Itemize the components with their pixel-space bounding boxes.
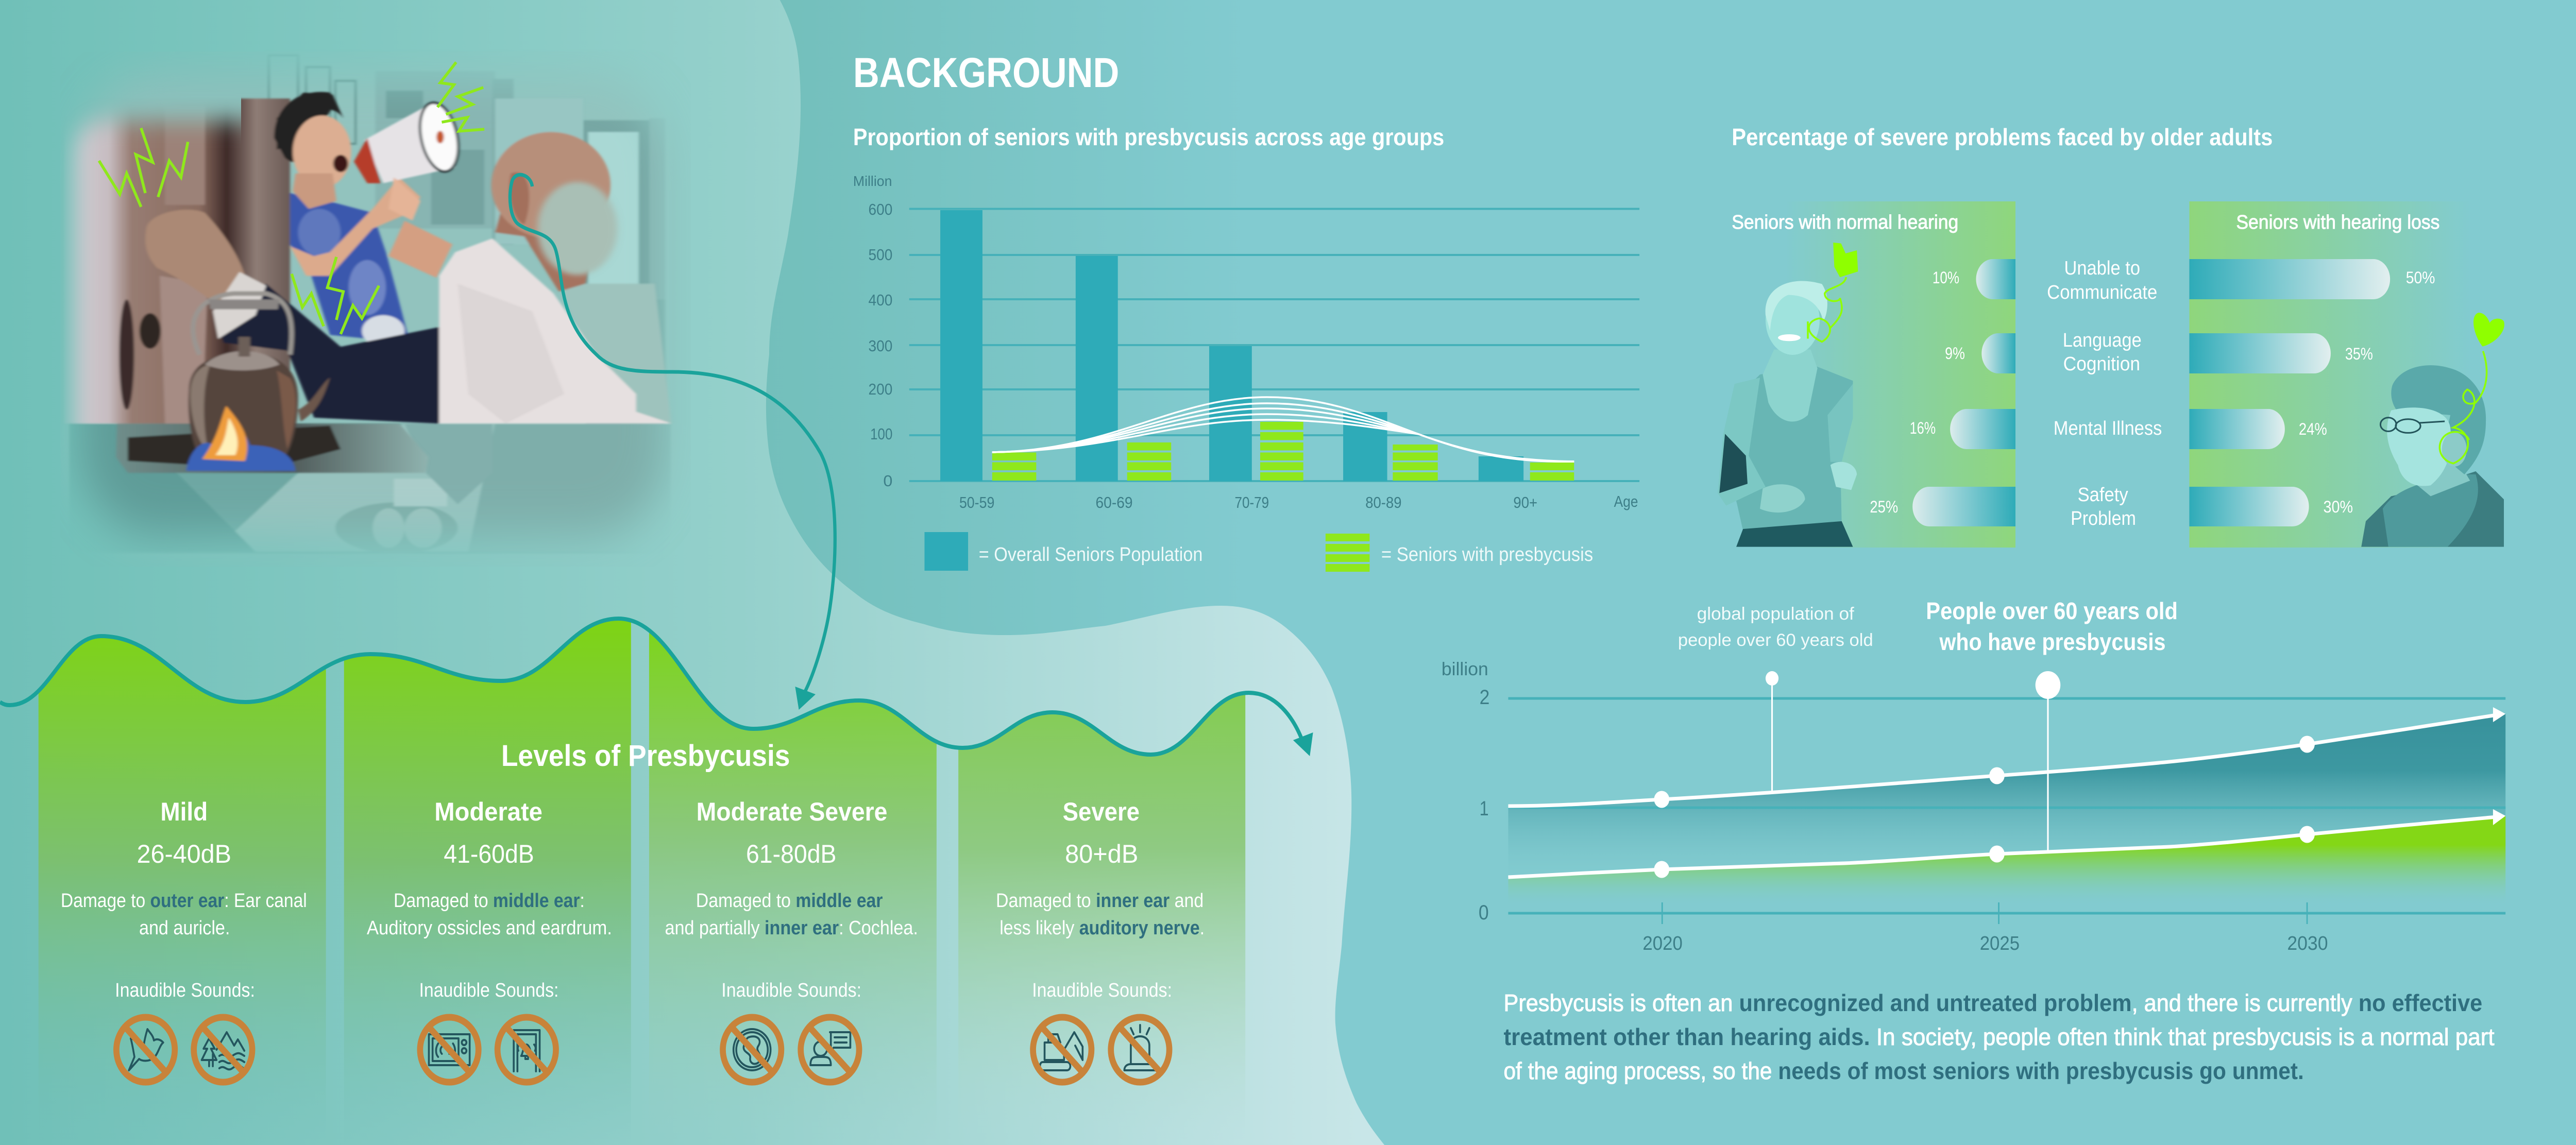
photo: sharp foreground figures bbox=[64, 92, 672, 473]
x axis labels: 50-59 bbox=[959, 494, 994, 511]
axis labels: 2030 bbox=[2287, 932, 2328, 954]
callout: global population: people over 60 years old bbox=[1678, 630, 1873, 650]
problem category labels: Safety bbox=[2078, 483, 2128, 505]
level: mild: 26-40dB bbox=[137, 840, 231, 869]
y axis labels: 300 bbox=[869, 337, 892, 355]
level: severe bbox=[996, 798, 1205, 1082]
photo: door bbox=[64, 98, 290, 423]
photo: woman hair and face bbox=[274, 92, 333, 162]
legend: = Seniors with presbycusis bbox=[1381, 543, 1593, 565]
values: normal hearing: 10% bbox=[1933, 269, 1959, 287]
heading: severe problems: Percentage of severe problems faced by older adults bbox=[1732, 124, 2273, 151]
level: moderate: Damaged to middle ear: bbox=[394, 889, 585, 911]
level: moderate bbox=[367, 798, 612, 1082]
level: mild: Inaudible Sounds: bbox=[115, 979, 255, 1001]
icon: no baby in womb bbox=[723, 1017, 781, 1082]
icon: no nature sounds bbox=[194, 1017, 252, 1082]
level: severe: Severe bbox=[1063, 798, 1140, 827]
line: presbycusis population bbox=[1508, 809, 2505, 878]
values: normal hearing bbox=[1870, 269, 1965, 516]
level: moderate severe: Moderate Severe bbox=[697, 798, 887, 827]
heading: levels of presbycusis: Levels of Presbycusis bbox=[501, 739, 790, 773]
level: moderate: Auditory ossicles and eardrum. bbox=[367, 916, 612, 938]
x axis labels: 80-89 bbox=[1365, 494, 1401, 511]
level: mild bbox=[61, 798, 307, 1082]
axis labels: 2 bbox=[1480, 686, 1489, 709]
level: moderate: Inaudible Sounds: bbox=[419, 979, 558, 1001]
panel: seniors with normal hearing: Seniors with normal hearing bbox=[1732, 211, 1958, 233]
photo: arm and fist knocking bbox=[215, 284, 439, 423]
level: moderate severe: 61-80dB bbox=[746, 840, 836, 869]
levels of presbycusis: green columns bbox=[39, 613, 1245, 1145]
axis labels: billion bbox=[1442, 659, 1488, 679]
photo: megaphone bbox=[365, 107, 455, 183]
photo: woman arms bbox=[290, 177, 420, 276]
y axis labels: 500 bbox=[869, 246, 892, 264]
level: severe: Damaged to inner ear and bbox=[996, 889, 1204, 911]
summary paragraph: treatment other than hearing aids. In society, people often think that presbycusis is a normal part bbox=[1503, 1024, 2495, 1051]
values: hearing loss bbox=[2299, 269, 2435, 516]
title: background: BACKGROUND bbox=[853, 48, 1119, 96]
wave line with arrow bbox=[0, 619, 1313, 756]
level: moderate severe: Inaudible Sounds: bbox=[721, 979, 861, 1001]
portrait: elderly woman with hearing aid bbox=[2361, 313, 2504, 547]
x axis labels: 70-79 bbox=[1235, 494, 1269, 511]
values: normal hearing: 9% bbox=[1945, 345, 1965, 363]
callout: people with presbycusis: who have presbycusis bbox=[1939, 629, 2166, 656]
area: global population over 60 bbox=[1508, 714, 2505, 886]
line: global population bbox=[1508, 707, 2505, 808]
problem category labels: Problem bbox=[2071, 507, 2136, 529]
y axis labels: 0 bbox=[883, 472, 892, 490]
axis labels: 0 bbox=[1479, 901, 1489, 924]
x axis labels: 60-69 bbox=[1096, 494, 1133, 511]
icon: no siren bbox=[1111, 1017, 1170, 1082]
problem category labels: Cognition bbox=[2063, 352, 2140, 374]
problem category labels bbox=[2047, 257, 2162, 529]
ear line connecting photo to levels, with arrow bbox=[510, 175, 835, 710]
x axis labels: Age bbox=[1614, 493, 1638, 510]
summary paragraph: Presbycusis is often an unrecognized and untreated problem , and there is currently no effective bbox=[1503, 990, 2482, 1017]
values: hearing loss: 50% bbox=[2406, 269, 2435, 287]
level: moderate: Moderate bbox=[434, 798, 543, 827]
icon: no doorbell bbox=[498, 1017, 556, 1082]
axis labels: 1 bbox=[1480, 797, 1489, 820]
bars: hearing loss bbox=[2189, 259, 2390, 526]
y axis labels: Million bbox=[853, 173, 892, 189]
callout: global population bbox=[1678, 604, 1873, 650]
y axis labels: 400 bbox=[869, 292, 892, 309]
level: severe: less likely auditory nerve. bbox=[999, 916, 1205, 938]
problem category labels: Unable to bbox=[2064, 257, 2140, 279]
problem category labels: Communicate bbox=[2047, 281, 2157, 303]
values: hearing loss: 24% bbox=[2299, 420, 2327, 438]
panel: seniors with normal hearing bbox=[1718, 201, 2015, 548]
callout: people with presbycusis: People over 60 years old bbox=[1926, 598, 2178, 625]
summary paragraph: of the aging process, so the needs of most seniors with presbycusis go unmet. bbox=[1503, 1058, 2304, 1085]
area chart: population over 60 bbox=[1442, 659, 2505, 954]
chart gridlines bbox=[1508, 698, 2505, 924]
problem category labels: Mental Illness bbox=[2054, 417, 2162, 439]
bar chart: seniors by age bbox=[853, 173, 1639, 572]
photo: woman dress bbox=[290, 193, 410, 343]
photo: man wall bbox=[495, 98, 583, 244]
y axis labels: 600 bbox=[869, 201, 892, 218]
callout pins bbox=[1766, 671, 2060, 851]
icon: no conversation bbox=[801, 1017, 859, 1082]
level: moderate severe: Damaged to middle ear bbox=[696, 889, 883, 911]
portrait: jogging woman bbox=[1718, 243, 1858, 547]
axis labels: 2025 bbox=[1980, 932, 2020, 954]
axis labels: 2020 bbox=[1642, 932, 1683, 954]
values: normal hearing: 25% bbox=[1870, 498, 1898, 516]
level: moderate severe bbox=[665, 798, 918, 1082]
photo: man shirt bbox=[439, 238, 672, 423]
values: normal hearing: 16% bbox=[1910, 419, 1936, 437]
photo: man head and neck bbox=[495, 205, 591, 292]
level: moderate: 41-60dB bbox=[444, 840, 534, 869]
icon: no birdsong bbox=[116, 1017, 175, 1082]
values: hearing loss: 30% bbox=[2324, 498, 2353, 516]
y axis labels: 100 bbox=[870, 425, 892, 443]
values: hearing loss: 35% bbox=[2345, 345, 2373, 363]
level: moderate severe: and partially inner ear: Cochlea. bbox=[665, 916, 918, 938]
icon: no microwave bbox=[420, 1017, 479, 1082]
area: people with presbycusis bbox=[1508, 816, 2505, 909]
level: mild: Mild bbox=[160, 798, 208, 827]
level: mild: and auricle. bbox=[139, 916, 230, 938]
x axis labels: 90+ bbox=[1513, 494, 1537, 511]
legend bbox=[924, 532, 1593, 572]
icon: no excavator bbox=[1033, 1017, 1091, 1082]
panel: seniors with hearing loss bbox=[2189, 201, 2504, 548]
level: severe: Inaudible Sounds: bbox=[1032, 979, 1172, 1001]
summary paragraph bbox=[1503, 990, 2495, 1085]
icon: green noise zigzags bbox=[99, 62, 484, 334]
photo: stove and kettle bbox=[116, 423, 429, 473]
panel: seniors with hearing loss: Seniors with hearing loss bbox=[2236, 211, 2439, 233]
heading: bar chart: Proportion of seniors with presbycusis across age groups bbox=[853, 124, 1444, 151]
overall population bars bbox=[940, 210, 1523, 481]
chart gridlines bbox=[909, 209, 1639, 481]
x axis labels bbox=[959, 493, 1638, 511]
photo: faded room background bbox=[60, 51, 691, 567]
photo illustration: woman with megaphone, knocked door, kettle and elderly man bbox=[60, 51, 691, 567]
bars: normal hearing bbox=[1912, 259, 2015, 526]
presbycusis stacked bars bbox=[992, 422, 1574, 481]
callout: global population: global population of bbox=[1697, 604, 1855, 623]
y axis labels: 200 bbox=[869, 381, 892, 398]
legend: = Overall Seniors Population bbox=[979, 543, 1202, 565]
y axis labels bbox=[853, 173, 892, 490]
axis labels bbox=[1442, 659, 2328, 954]
problem category labels: Language bbox=[2063, 329, 2142, 351]
level: severe: 80+dB bbox=[1065, 840, 1138, 869]
callout: people with presbycusis bbox=[1926, 598, 2178, 656]
white trend curves bbox=[992, 397, 1574, 462]
pale organic panel bbox=[0, 0, 1384, 1145]
level: mild: Damage to outer ear: Ear canal bbox=[61, 889, 307, 911]
